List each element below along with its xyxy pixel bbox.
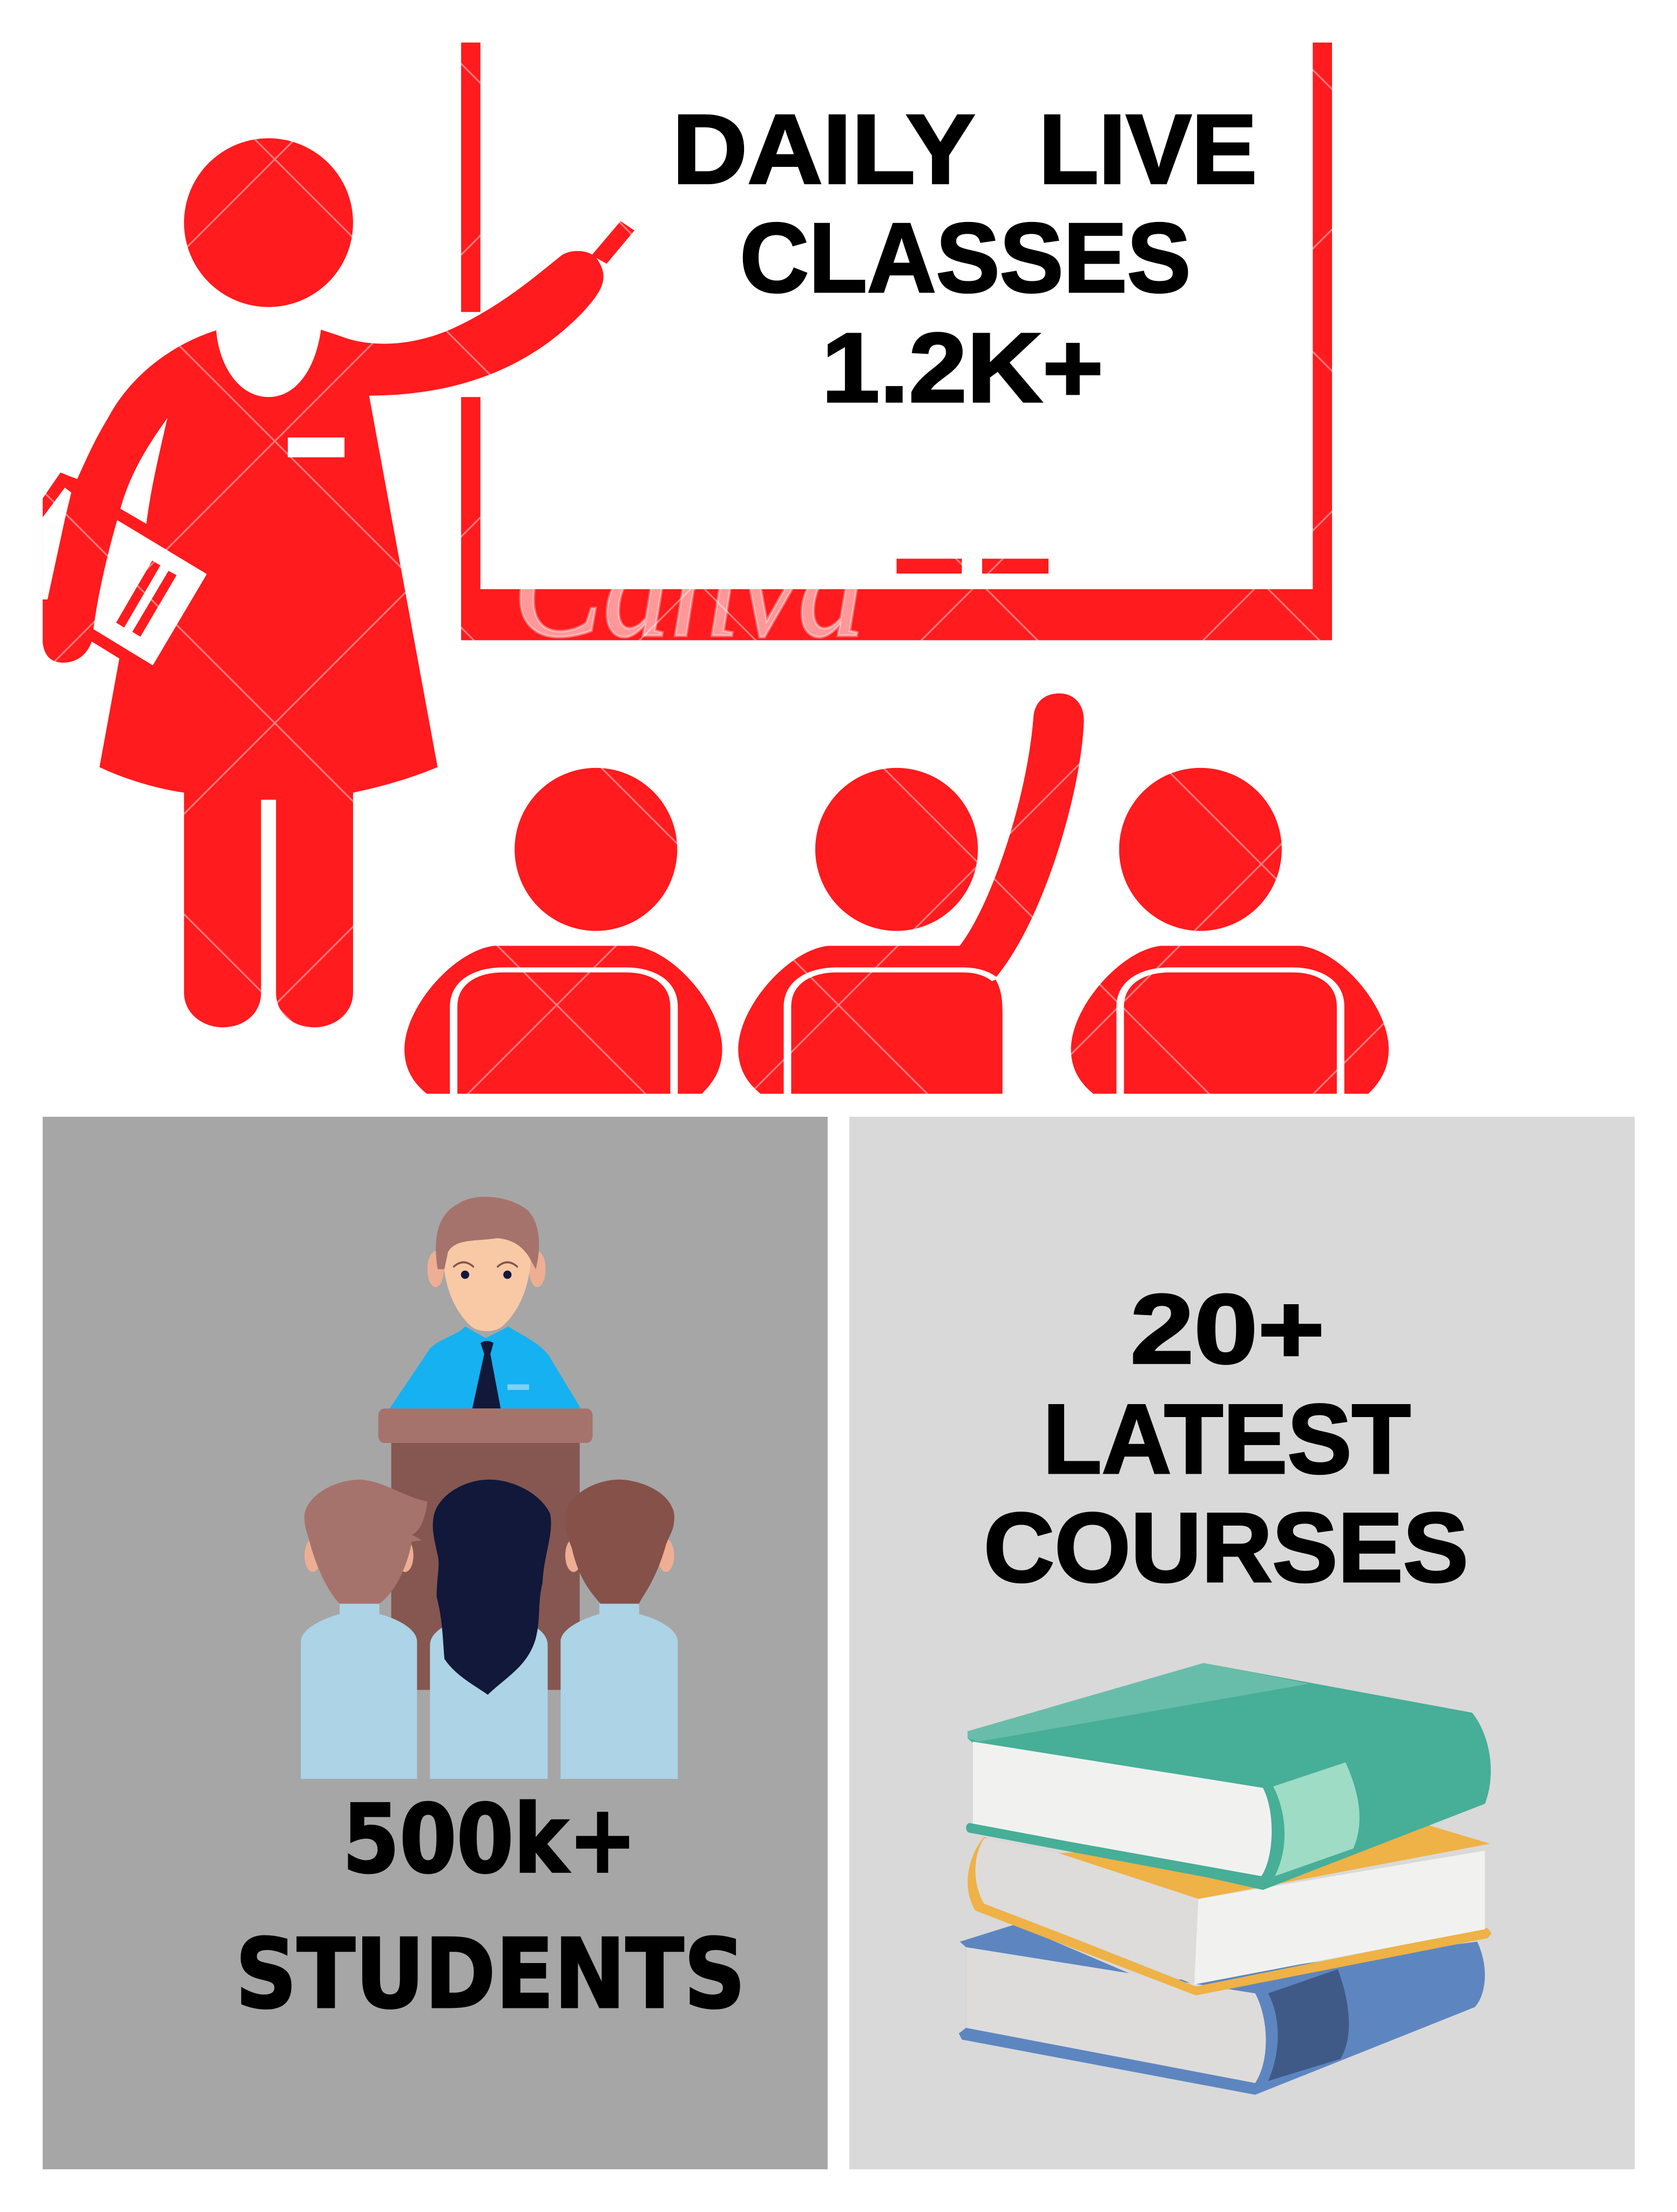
icon: student raising hand [738, 693, 1084, 1095]
text: 20+ latest courses: LATEST [1043, 1384, 1411, 1494]
yellow book [968, 1824, 1492, 1995]
audience member left [301, 1480, 428, 1779]
watermark wordmark: Canva [513, 505, 865, 667]
teacher left arm and held book [43, 331, 216, 665]
name tag [288, 437, 344, 457]
panel: daily live classes illustration [38, 42, 1451, 1095]
text: 20+ latest courses: 20+ [1130, 1274, 1324, 1384]
icon: student right [1071, 768, 1389, 1095]
heading: daily live classes 1.2K+: CLASSES [740, 203, 1191, 313]
watermark lattice [42, 42, 1451, 1094]
green book [968, 1663, 1491, 1890]
heading: daily live classes 1.2K+: 1.2K+ [822, 313, 1104, 423]
icon: student left [404, 768, 722, 1095]
panel: latest courses [849, 1117, 1635, 2169]
heading: daily live classes 1.2K+ [672, 94, 1257, 423]
text: 20+ latest courses [984, 1274, 1469, 1603]
icon: teacher figure [99, 138, 634, 1027]
podium [378, 1408, 593, 1690]
text: 500k+ students [235, 1785, 746, 2030]
icon: lecturer and audience [301, 1197, 678, 1779]
icon: chalkboard [461, 43, 1332, 640]
panel: students [43, 1117, 828, 2169]
lecturer [390, 1197, 581, 1408]
heading: daily live classes 1.2K+: LIVE [1039, 94, 1257, 204]
text: 500k+ students: 500k+ [342, 1785, 637, 1894]
audience member right [560, 1480, 678, 1779]
audience member middle [430, 1480, 551, 1779]
text: 20+ latest courses: COURSES [984, 1493, 1469, 1603]
text: 500k+ students: STUDENTS [235, 1918, 746, 2030]
heading: daily live classes 1.2K+: DAILY [672, 94, 975, 204]
icon: stack of books [959, 1663, 1492, 2095]
chalk pieces on board ledge [897, 559, 1049, 574]
blue book [959, 1924, 1485, 2095]
